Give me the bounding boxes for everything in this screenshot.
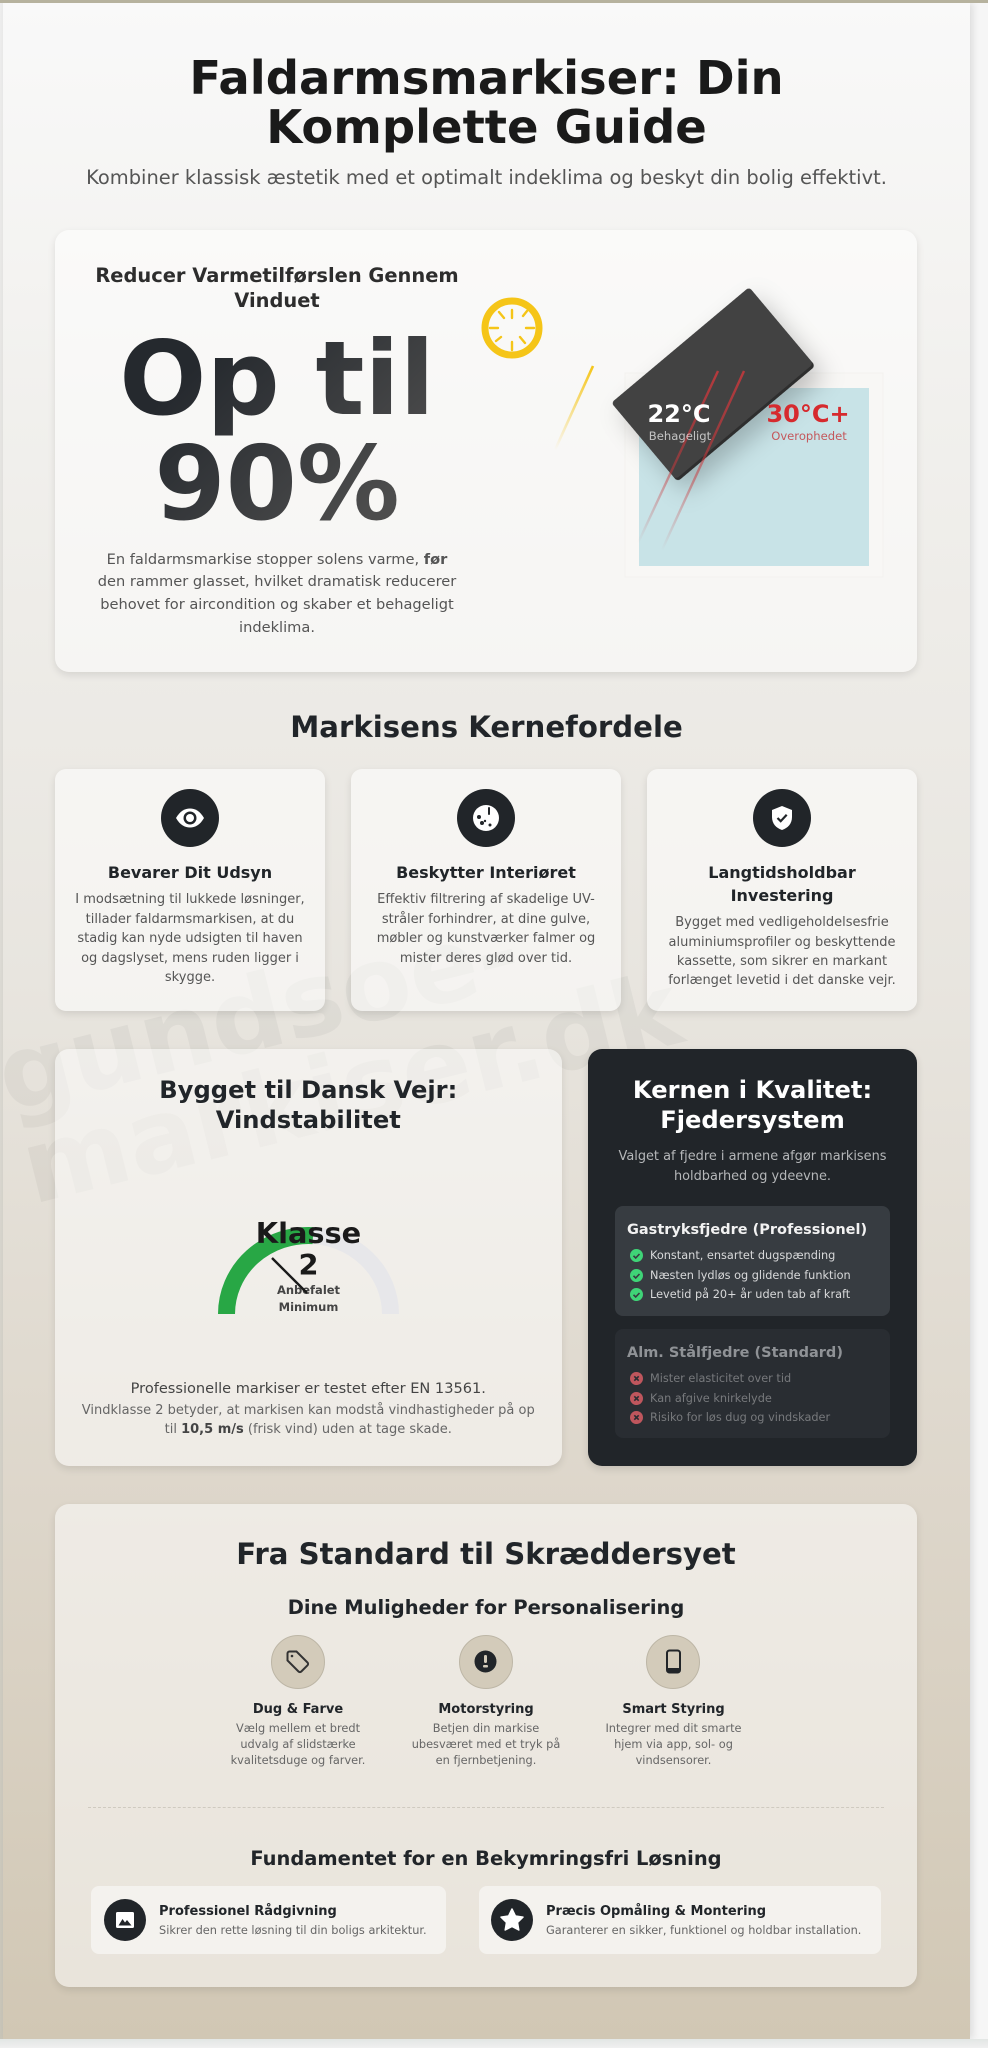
gauge value text xyxy=(256,1216,361,1314)
option title: Motorstyring xyxy=(438,1702,534,1716)
wind text: Professionelle markiser er testet efter EN 13561. xyxy=(131,1380,486,1397)
benefit text: stråler forhindrer, at dine gulve, xyxy=(382,912,590,927)
gauge track xyxy=(226,1236,390,1314)
hero description: En faldarmsmarkise stopper solens varme, før xyxy=(107,550,447,568)
title xyxy=(189,51,784,154)
subtitle: Kombiner klassisk æstetik med et optimalt indeklima og beskyt din bolig effektivt. xyxy=(86,166,887,189)
sun ray xyxy=(555,366,593,450)
benefit text: stadig kan nyde udsigten til haven xyxy=(77,931,303,946)
benefit title xyxy=(708,863,856,905)
steel item: Risiko for løs dug og vindskader xyxy=(650,1411,830,1424)
spring intro xyxy=(618,1149,886,1184)
wind detail text: til 10,5 m/s (frisk vind) uden at tage skade. xyxy=(165,1422,452,1437)
benefit text xyxy=(377,892,595,966)
wind heading: Bygget til Dansk Vejr: xyxy=(159,1076,457,1104)
panel: gas springs xyxy=(615,1206,890,1316)
hero description: behovet for aircondition og skaber et behageligt xyxy=(100,596,454,613)
awning xyxy=(611,287,815,482)
hero heading xyxy=(95,264,459,312)
window glass xyxy=(639,388,869,566)
option: motor xyxy=(412,1635,560,1767)
big statistic: 90% xyxy=(154,425,400,544)
benefit text: møbler og kunstværker falmer og xyxy=(377,931,595,946)
icon: motor xyxy=(458,1634,512,1688)
gauge value text: 2 xyxy=(298,1248,319,1282)
gas heading: Gastryksfjedre (Professionel) xyxy=(627,1222,867,1238)
benefit text: skygge. xyxy=(165,970,215,985)
gauge value text: Klasse xyxy=(256,1216,361,1250)
icon: palette xyxy=(457,789,515,847)
option text xyxy=(605,1721,742,1767)
option: smart control xyxy=(605,1635,742,1767)
measuring title: Præcis Opmåling & Montering xyxy=(546,1904,766,1919)
gauge value text: Minimum xyxy=(279,1300,338,1314)
spring heading: Kernen i Kvalitet: xyxy=(633,1076,872,1104)
big statistic: Op til xyxy=(119,320,435,439)
panel: benefit investment xyxy=(647,769,917,1011)
label: 30 degrees: Overophedet xyxy=(771,429,847,443)
option text: ubesværet med et tryk på xyxy=(412,1737,560,1751)
watermark: markiser.dk xyxy=(10,949,695,1228)
label: 30 degrees xyxy=(766,400,850,443)
heat rays xyxy=(638,371,744,550)
option title: Dug & Farve xyxy=(253,1702,343,1716)
option text: Betjen din markise xyxy=(433,1721,539,1735)
hero heading: Vinduet xyxy=(234,289,320,312)
hero heading: Reducer Varmetilførslen Gennem xyxy=(95,264,459,287)
option text: Vælg mellem et bredt xyxy=(236,1721,360,1735)
icon: tag xyxy=(270,1634,324,1688)
gauge needle xyxy=(272,1258,307,1293)
steel item: Mister elasticitet over tid xyxy=(650,1372,791,1385)
wind heading xyxy=(159,1076,457,1134)
panel: wind stability xyxy=(55,1049,562,1466)
label: 22 degrees: Behageligt xyxy=(649,429,712,443)
wind heading: Vindstabilitet xyxy=(216,1106,401,1134)
card: measuring xyxy=(479,1886,881,1954)
measuring text: Garanterer en sikker, funktionel og holdbar installation. xyxy=(546,1923,861,1937)
benefit text: kassette, som sikrer en markant xyxy=(677,954,887,969)
benefit title: Beskytter Interiøret xyxy=(396,863,576,882)
watermark: gundsoe- xyxy=(0,892,532,1136)
gas item: Næsten lydløs og glidende funktion xyxy=(650,1268,851,1282)
window frame xyxy=(625,373,883,577)
benefit text: aluminiumsprofiler og beskyttende xyxy=(669,935,895,950)
label: 22 degrees xyxy=(647,400,712,443)
option: fabric xyxy=(231,1635,365,1767)
title: Komplette Guide xyxy=(266,100,707,154)
option text: kvalitetsduge og farver. xyxy=(231,1753,365,1767)
benefit text: I modsætning til lukkede løsninger, xyxy=(75,892,305,907)
card: advice xyxy=(91,1886,446,1954)
benefit text: mister deres glød over tid. xyxy=(400,951,572,966)
icon: image xyxy=(104,1899,146,1941)
hero description xyxy=(98,550,456,636)
hero description: den rammer glasset, hvilket dramatisk reducerer xyxy=(98,573,456,590)
benefit title: Bevarer Dit Udsyn xyxy=(108,863,272,882)
label: 22 degrees: 22°C xyxy=(647,400,711,428)
panel: steel springs xyxy=(615,1329,890,1438)
wind detail text xyxy=(82,1402,535,1437)
benefit text: forlænget levetid i det danske vejr. xyxy=(668,973,896,988)
panel: heat reduction hero xyxy=(55,230,917,672)
gauge xyxy=(218,1216,399,1314)
icon: sun xyxy=(485,301,539,355)
option text: en fjernbetjening. xyxy=(436,1753,536,1767)
benefit text xyxy=(668,915,896,988)
option text xyxy=(412,1721,560,1767)
gauge value text: Anbefalet xyxy=(277,1283,341,1297)
gas item: Levetid på 20+ år uden tab af kraft xyxy=(650,1288,850,1301)
hero description: indeklima. xyxy=(239,619,315,636)
icon: shield xyxy=(753,789,811,847)
icon: eye xyxy=(161,789,219,847)
option text: hjem via app, sol- og xyxy=(614,1737,733,1751)
panel: benefit interior xyxy=(351,769,621,1011)
option text: udvalg af slidstærke xyxy=(240,1737,356,1751)
benefit title: Langtidsholdbar xyxy=(708,863,856,882)
spring heading: Fjedersystem xyxy=(660,1106,845,1134)
spring intro: holdbarhed og ydeevne. xyxy=(674,1169,831,1184)
option title: Smart Styring xyxy=(622,1702,725,1716)
options heading: Dine Muligheder for Personalisering xyxy=(288,1596,684,1619)
gas item: Konstant, ensartet dugspænding xyxy=(650,1249,835,1262)
big statistic xyxy=(87,327,467,537)
title: Faldarmsmarkiser: Din xyxy=(189,51,784,105)
steel heading: Alm. Stålfjedre (Standard) xyxy=(627,1345,843,1361)
advice text: Sikrer den rette løsning til din boligs arkitektur. xyxy=(159,1923,427,1937)
panel: customisation xyxy=(55,1504,917,1987)
option text: Integrer med dit smarte xyxy=(605,1721,742,1735)
spring heading xyxy=(633,1076,872,1134)
option text: vindsensorer. xyxy=(636,1753,711,1767)
benefit text: og dagslyset, mens ruden ligger i xyxy=(81,951,299,966)
icon: star xyxy=(491,1899,533,1941)
wind detail text: Vindklasse 2 betyder, at markisen kan modstå vindhastigheder på op xyxy=(82,1403,535,1418)
gauge value arc xyxy=(226,1235,313,1314)
foundation heading: Fundamentet for en Bekymringsfri Løsning xyxy=(250,1847,722,1870)
benefit text xyxy=(75,892,305,985)
section heading: core benefits: Markisens Kernefordele xyxy=(290,710,683,744)
panel: benefit view xyxy=(55,769,325,1011)
benefit title: Investering xyxy=(731,886,833,905)
advice title: Professionel Rådgivning xyxy=(159,1904,337,1919)
panel: spring system xyxy=(588,1049,917,1466)
customisation heading: Fra Standard til Skræddersyet xyxy=(236,1537,736,1571)
illustration: sun, awning and window xyxy=(482,288,869,566)
steel item: Kan afgive knirkelyde xyxy=(650,1392,772,1404)
icon: phone xyxy=(646,1634,700,1688)
benefit text: Bygget med vedligeholdelsesfrie xyxy=(675,915,889,930)
label: 30 degrees: 30°C+ xyxy=(766,400,850,428)
spring intro: Valget af fjedre i armene afgør markisens xyxy=(619,1149,886,1164)
option text xyxy=(231,1721,365,1767)
benefit text: tillader faldarmsmarkisen, at du xyxy=(86,912,294,927)
benefit text: Effektiv filtrering af skadelige UV- xyxy=(377,892,595,907)
